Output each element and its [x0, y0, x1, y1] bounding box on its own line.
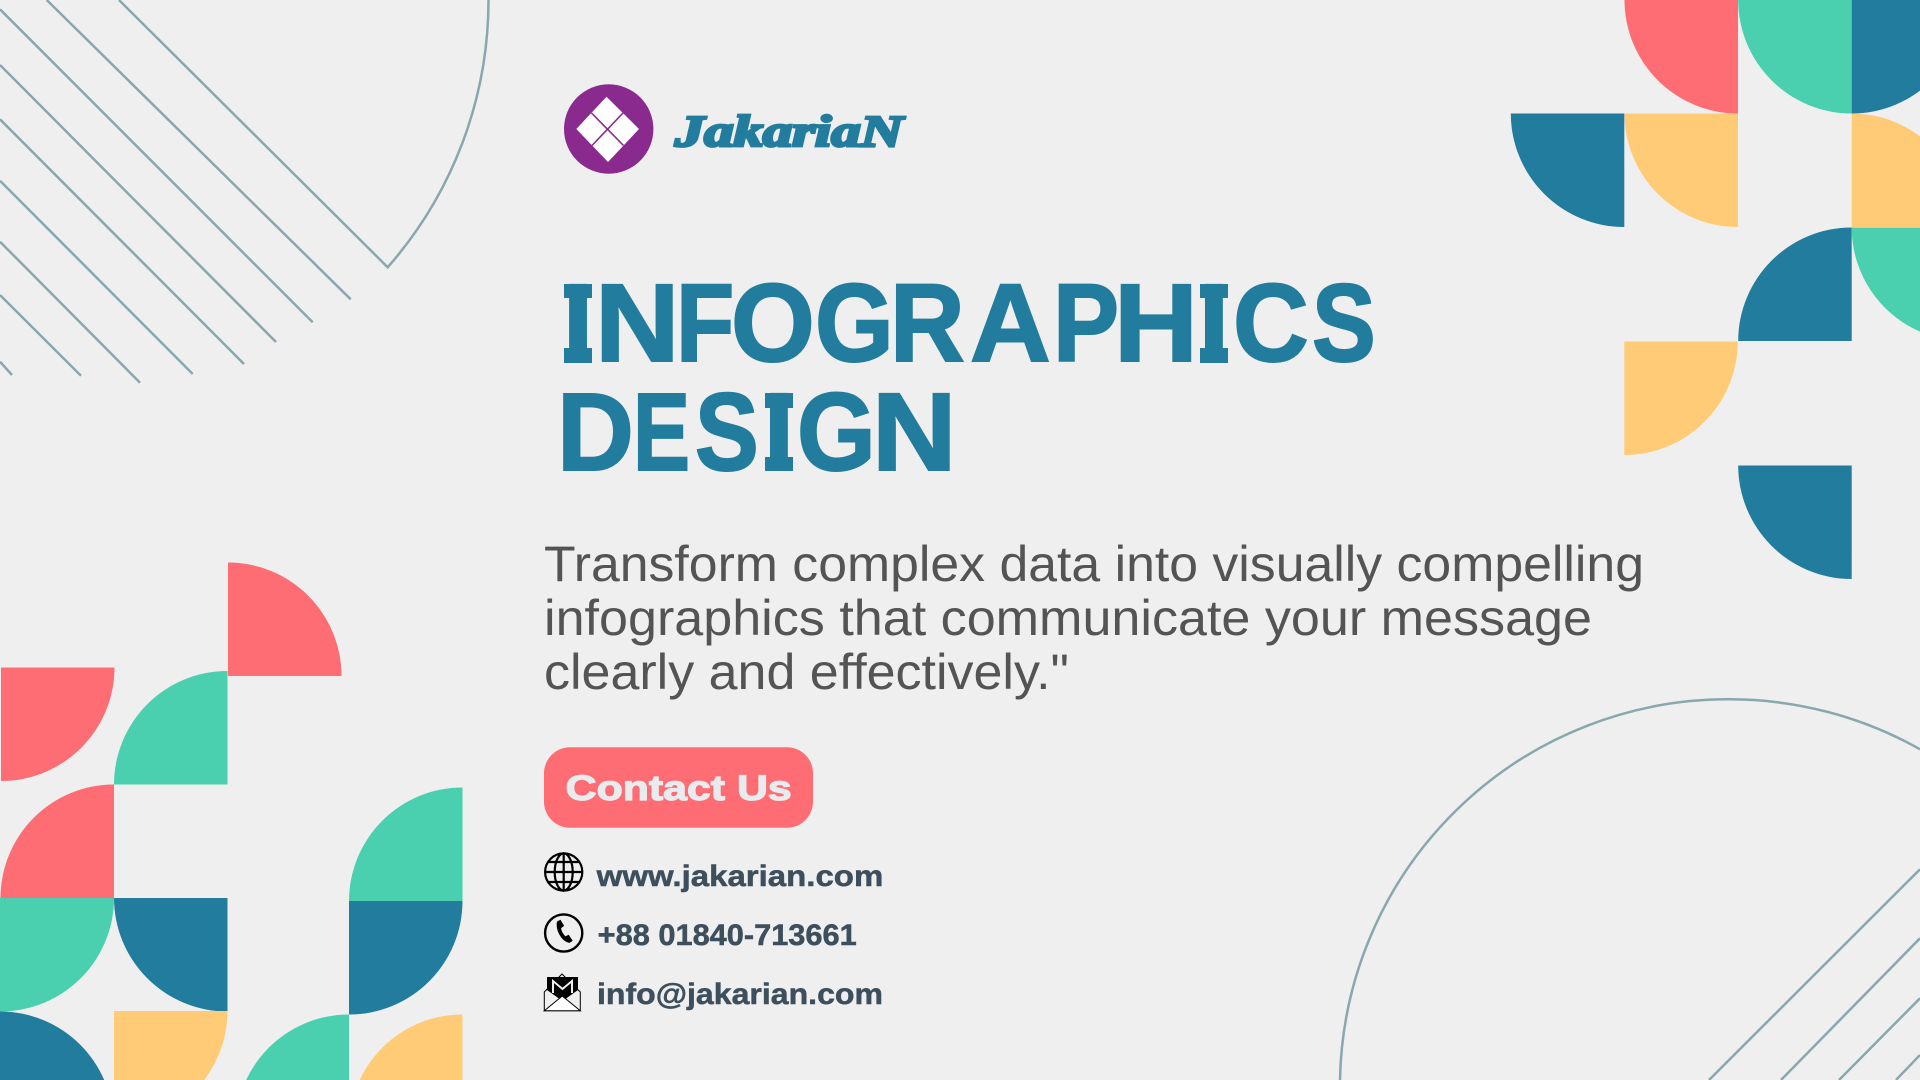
subtitle paragraph	[544, 536, 1644, 700]
title: S	[695, 370, 758, 494]
subtitle paragraph: clearly and effectively."	[544, 644, 1069, 700]
title: O	[731, 262, 815, 385]
icon: globe	[545, 853, 582, 891]
logo wordmark: JakariaN	[674, 107, 906, 156]
decoration: bottom-right arc and diagonal lines	[1340, 699, 1920, 1080]
contact row: website	[545, 853, 883, 893]
subtitle paragraph: infographics that communicate your message	[544, 590, 1592, 646]
title: C	[1232, 262, 1308, 385]
subtitle paragraph: Transform complex data into visually compelling	[544, 536, 1644, 592]
phone text: +88 01840-713661	[598, 919, 857, 952]
decoration: top-right quarter circles	[1511, 0, 1920, 579]
title: F	[676, 262, 734, 385]
title: N	[872, 370, 956, 494]
title: A	[970, 262, 1051, 385]
title: I	[563, 262, 593, 385]
email text: info@jakarian.com	[597, 978, 883, 1011]
title: S	[1312, 262, 1376, 385]
title: N	[595, 262, 680, 385]
title: H	[1114, 262, 1197, 385]
title: I	[764, 370, 794, 494]
icon: mail envelope	[544, 974, 580, 1011]
decoration: top-left arc and diagonal lines	[0, 0, 488, 383]
icon: purple circle with diamond	[564, 84, 653, 174]
title	[557, 262, 1376, 494]
title: G	[815, 262, 894, 385]
title: E	[633, 370, 690, 494]
title: D	[557, 370, 634, 494]
title: P	[1053, 262, 1119, 385]
button: Contact Us: Contact Us	[566, 769, 792, 808]
icon: phone	[545, 914, 582, 952]
decoration: bottom-left quarter circles	[0, 562, 462, 1080]
title: G	[797, 370, 876, 494]
logo: JakariaN	[564, 84, 906, 174]
contact row: phone	[545, 914, 857, 952]
title: I	[1199, 262, 1229, 385]
title: R	[890, 262, 965, 385]
button: Contact Us	[544, 747, 813, 828]
contact row: email	[544, 974, 883, 1011]
website text: www.jakarian.com	[596, 860, 883, 893]
